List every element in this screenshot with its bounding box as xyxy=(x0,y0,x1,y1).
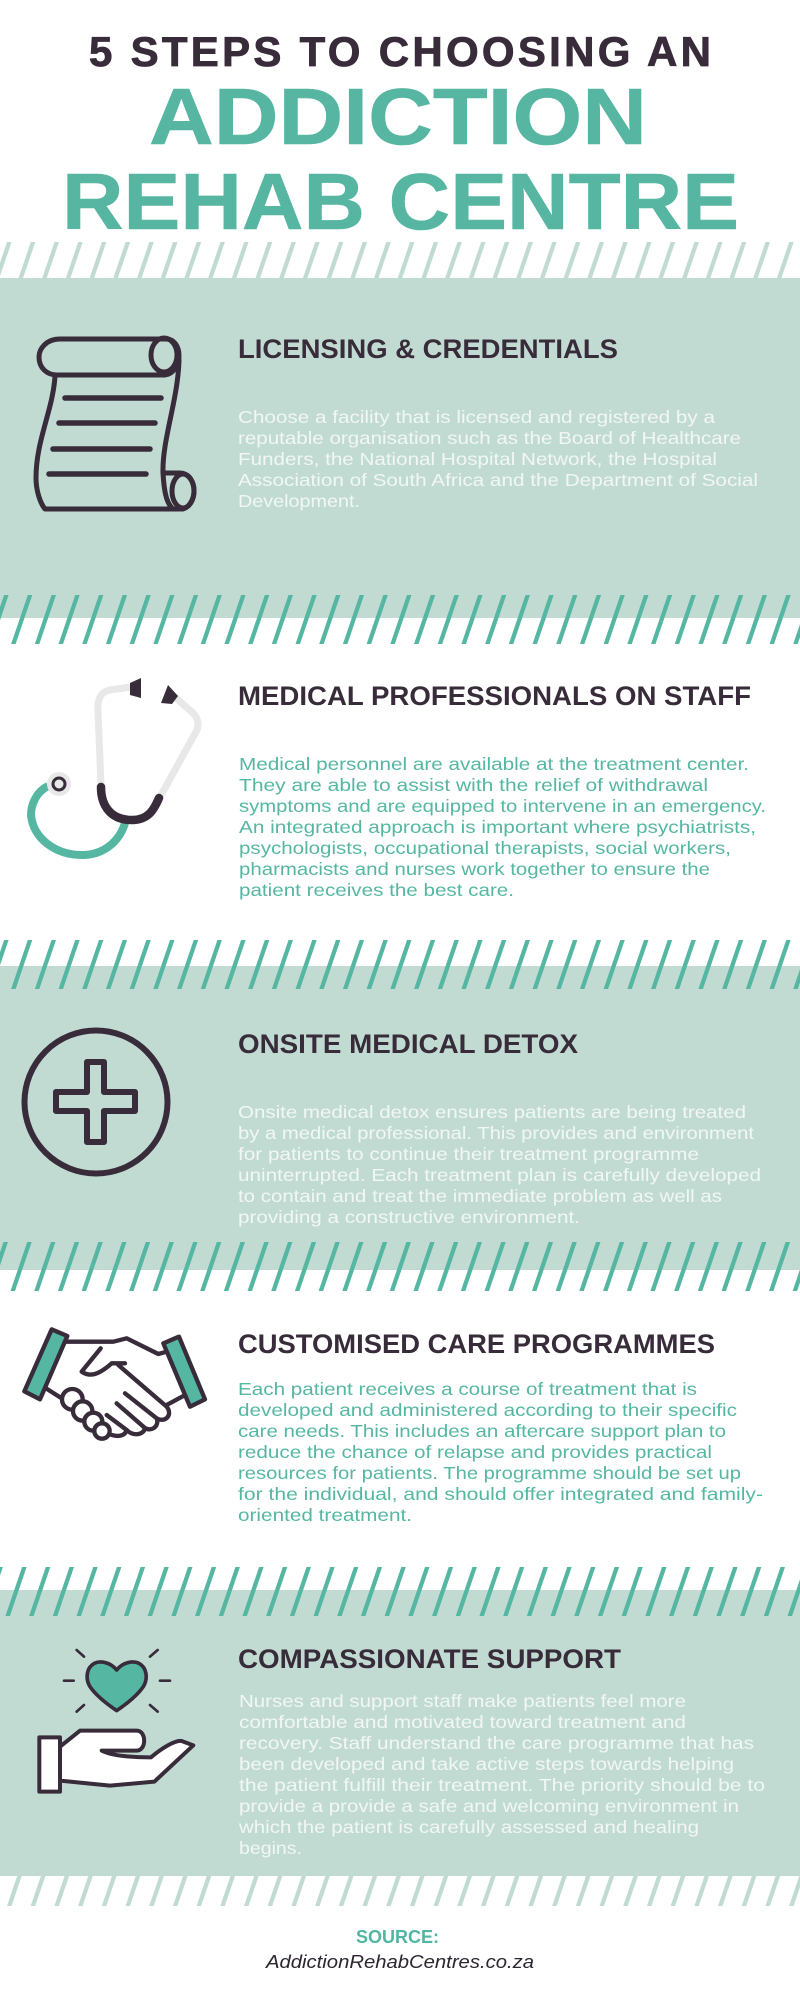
text block: compassionate support: which the patient is carefully assessed and healing xyxy=(238,1817,699,1837)
panel: onsite medical detox xyxy=(0,966,800,1270)
text block: compassionate support xyxy=(238,1691,765,1858)
text block: medical professionals: They are able to assist with the relief of withdrawal xyxy=(239,775,708,795)
text block: customised care programmes xyxy=(238,1379,763,1525)
text block: compassionate support: the patient fulfill their treatment. The priority should be to xyxy=(239,1775,765,1795)
text block: onsite medical detox: for patients to continue their treatment programme xyxy=(238,1144,699,1164)
source credit: AddictionRehabCentres.co.za xyxy=(265,1952,534,1972)
text block: licensing and credentials: Funders, the National Hospital Network, the Hospital xyxy=(238,449,717,469)
title: ADDICTION xyxy=(149,72,647,161)
panel: compassionate support xyxy=(0,1590,800,1876)
text block: customised care programmes: developed and administered according to their specific xyxy=(238,1400,737,1420)
source credit: SOURCE: xyxy=(356,1927,439,1947)
panel: customised care programmes xyxy=(0,1270,800,1590)
heading: onsite medical detox: ONSITE MEDICAL DETOX xyxy=(238,1029,578,1059)
text block: onsite medical detox: by a medical professional. This provides and environment xyxy=(238,1123,754,1143)
icon: heart over open hand xyxy=(39,1650,193,1792)
text block: customised care programmes: resources for patients. The programme should be set up xyxy=(238,1463,741,1483)
panel: medical professionals xyxy=(0,618,800,966)
text block: compassionate support: provide a provide a safe and welcoming environment in xyxy=(239,1796,739,1816)
heading: medical professionals: MEDICAL PROFESSIONALS ON STAFF xyxy=(238,681,751,711)
text block: licensing and credentials xyxy=(238,407,758,511)
text block: licensing and credentials: reputable organisation such as the Board of Healthcare xyxy=(238,428,741,448)
text block: customised care programmes: oriented treatment. xyxy=(238,1505,412,1525)
title xyxy=(62,28,739,246)
text block: compassionate support: begins. xyxy=(239,1838,302,1858)
text block: onsite medical detox: to contain and treat the immediate problem as well as xyxy=(238,1186,722,1206)
icon: medical cross in circle xyxy=(24,1030,168,1174)
title: 5 STEPS TO CHOOSING AN xyxy=(89,28,711,75)
title: REHAB CENTRE xyxy=(62,157,739,246)
icon: stethoscope xyxy=(31,678,198,855)
text block: customised care programmes: care needs. This includes an aftercare support plan to xyxy=(238,1421,726,1441)
text block: onsite medical detox: providing a constructive environment. xyxy=(238,1207,580,1227)
text block: licensing and credentials: Development. xyxy=(238,491,360,511)
text block: compassionate support: been developed and take active steps towards helping xyxy=(239,1754,734,1774)
text block: medical professionals: patient receives the best care. xyxy=(239,880,514,900)
text block: onsite medical detox xyxy=(238,1102,761,1227)
text block: customised care programmes: reduce the chance of relapse and provides practical xyxy=(238,1442,712,1462)
text block: medical professionals: pharmacists and nurses work together to ensure the xyxy=(239,859,710,879)
text block: compassionate support: Nurses and support staff make patients feel more xyxy=(239,1691,686,1711)
text block: medical professionals: An integrated approach is important where psychiatrists, xyxy=(239,817,756,837)
text block: customised care programmes: for the individual, and should offer integrated and family- xyxy=(238,1484,763,1504)
text block: onsite medical detox: uninterrupted. Each treatment plan is carefully developed xyxy=(238,1165,761,1185)
heading: licensing and credentials: LICENSING & CREDENTIALS xyxy=(238,334,618,364)
text block: medical professionals: Medical personnel are available at the treatment center. xyxy=(239,754,749,774)
text block: medical professionals xyxy=(239,754,766,900)
text block: medical professionals: symptoms and are equipped to intervene in an emergency. xyxy=(239,796,766,816)
text block: licensing and credentials: Association of South Africa and the Department of Social xyxy=(238,470,758,490)
text block: customised care programmes: Each patient receives a course of treatment that is xyxy=(238,1379,697,1399)
text block: licensing and credentials: Choose a facility that is licensed and registered by a xyxy=(238,407,715,427)
icon: handshake xyxy=(24,1329,205,1439)
heading: customised care programmes: CUSTOMISED CARE PROGRAMMES xyxy=(238,1329,715,1359)
text block: onsite medical detox: Onsite medical detox ensures patients are being treated xyxy=(238,1102,746,1122)
text block: compassionate support: recovery. Staff understand the care programme that has xyxy=(239,1733,754,1753)
text block: compassionate support: comfortable and motivated toward treatment and xyxy=(239,1712,686,1732)
heading: compassionate support: COMPASSIONATE SUPPORT xyxy=(238,1644,622,1674)
icon: scroll xyxy=(36,338,194,509)
panel: licensing and credentials xyxy=(0,278,800,618)
text block: medical professionals: psychologists, occupational therapists, social workers, xyxy=(239,838,731,858)
source credit xyxy=(265,1927,534,1972)
